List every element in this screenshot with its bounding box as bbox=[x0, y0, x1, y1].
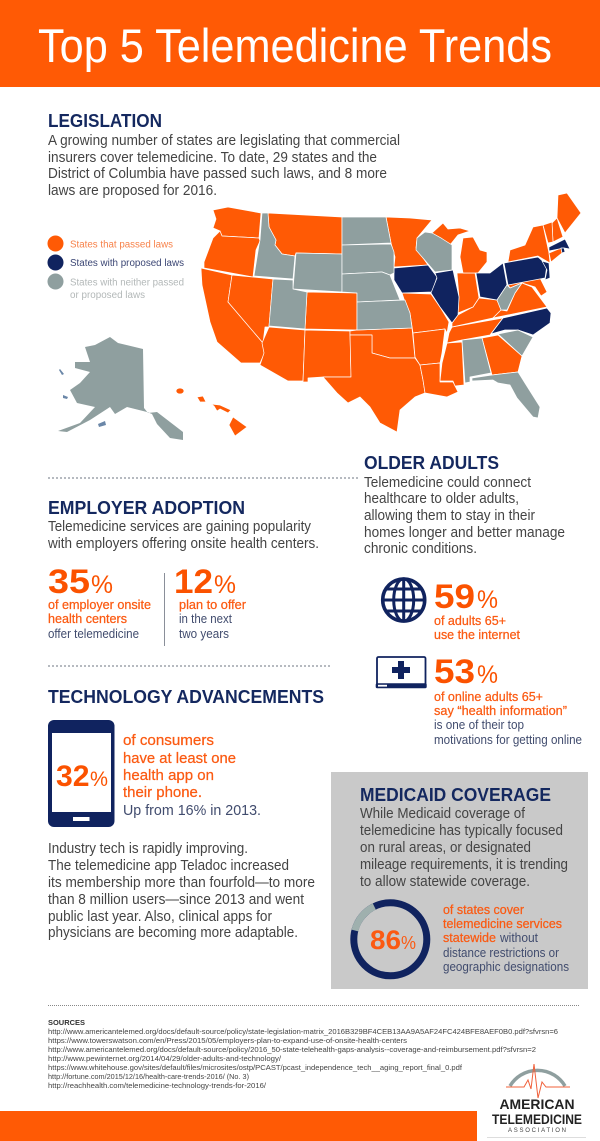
technology body text bbox=[48, 841, 315, 941]
panel: older adults bbox=[364, 453, 582, 747]
app statistic text: of consumers bbox=[123, 732, 214, 749]
stat: 35 percent: % bbox=[91, 571, 113, 599]
map legend bbox=[48, 236, 184, 301]
map legend: States with proposed laws bbox=[70, 258, 184, 269]
sources list: https://www.towerswatson.com/en/Press/2015/05/employers-plan-to-expand-use-of-onsite-health-centers bbox=[48, 1036, 407, 1045]
medicaid statistic text: telemedicine services bbox=[443, 916, 562, 931]
panel: older adults: healthcare to older adults, bbox=[364, 491, 519, 507]
stat: 59 percent: % bbox=[477, 586, 498, 614]
panel: medicaid coverage: MEDICAID COVERAGE bbox=[360, 785, 551, 805]
stat: 12 percent: two years bbox=[179, 626, 229, 641]
app statistic text: health app on bbox=[123, 767, 214, 784]
panel: older adults: allowing them to stay in their bbox=[364, 508, 535, 524]
medicaid statistic text: statewide bbox=[443, 930, 496, 945]
icon: globe bbox=[382, 579, 425, 621]
medicaid statistic text: distance restrictions or bbox=[443, 945, 560, 960]
stat: 12 percent bbox=[174, 563, 247, 641]
US map bbox=[58, 193, 581, 440]
sources list: http://reachhealth.com/telemedicine-technology-trends-for-2016/ bbox=[48, 1081, 267, 1090]
stat: 53 percent: % bbox=[477, 661, 498, 689]
stat: 53 percent: is one of their top bbox=[434, 717, 524, 732]
map legend: or proposed laws bbox=[70, 290, 145, 301]
sources list: SOURCES bbox=[48, 1018, 85, 1027]
panel: medicaid coverage: on rural areas, or designated bbox=[360, 840, 531, 856]
medicaid statistic text bbox=[443, 902, 569, 974]
app statistic text: have at least one bbox=[123, 750, 236, 767]
medicaid statistic text: geographic designations bbox=[443, 959, 569, 974]
stat: 53 percent bbox=[434, 653, 582, 747]
app statistic text: their phone. bbox=[123, 784, 202, 801]
stat: 12 percent: in the next bbox=[179, 611, 232, 626]
stat: 12 percent: plan to offer bbox=[179, 597, 247, 612]
icon: tablet with 32 percent: % bbox=[90, 768, 108, 791]
logo: American Telemedicine Association: TELEMEDICINE bbox=[492, 1111, 582, 1127]
panel: older adults: chronic conditions. bbox=[364, 541, 477, 557]
stat: 59 percent bbox=[434, 578, 520, 642]
map legend: States that passed laws bbox=[70, 240, 173, 250]
stat: 53 percent: of online adults 65+ bbox=[434, 689, 543, 704]
stat: 53 percent: say “health information” bbox=[434, 703, 567, 718]
sources list: http://fortune.com/2015/12/16/health-care-trends-2016/ (No. 3) bbox=[48, 1072, 249, 1081]
panel: medicaid coverage: mileage requirements, it is trending bbox=[360, 857, 568, 873]
panel: legislation text: LEGISLATION bbox=[48, 111, 162, 131]
medicaid statistic text: of states cover bbox=[443, 902, 525, 917]
sources list: http://www.pewinternet.org/2014/04/29/older-adults-and-technology/ bbox=[48, 1054, 282, 1063]
sources list bbox=[48, 1018, 558, 1090]
stat: 59 percent: of adults 65+ bbox=[434, 613, 506, 628]
footer bar bbox=[0, 1111, 477, 1141]
panel: employer adoption: Telemedicine services are gaining popularity bbox=[48, 519, 312, 535]
panel: legislation text: insurers cover telemedicine. To date, 29 states and the bbox=[48, 150, 377, 166]
technology body text: public last year. Also, clinical apps for bbox=[48, 909, 272, 925]
panel: medicaid coverage: While Medicaid coverage of bbox=[360, 806, 526, 822]
icon: tablet with 32 percent: 32 bbox=[56, 760, 90, 793]
panel: older adults: Telemedicine could connect bbox=[364, 475, 531, 491]
logo: American Telemedicine Association: ASSOCIATION bbox=[508, 1128, 566, 1134]
title banner bbox=[0, 0, 600, 87]
states with neither passed nor proposed laws bbox=[58, 213, 540, 440]
stat: 35 percent: health centers bbox=[48, 611, 127, 626]
sources list: http://www.americantelemed.org/docs/default-source/policy/state-legislation-matrix_2016B329BF4CEB13AA9A5AF24FC424BFE8AEF0B0.pdf?sfvrsn=6 bbox=[48, 1027, 558, 1036]
stat: 12 percent: 12 bbox=[174, 563, 213, 601]
panel: medicaid coverage: to allow statewide coverage. bbox=[360, 874, 530, 890]
logo: American Telemedicine Association: AMERICAN bbox=[500, 1096, 574, 1112]
stat: 35 percent bbox=[48, 563, 151, 641]
divider bbox=[48, 665, 330, 667]
stat: 53 percent: 53 bbox=[434, 653, 475, 691]
sources list: http://www.americantelemed.org/docs/default-source/policy/2016_50-state-telehealth-gaps-analysis--coverage-and-reimbursement.pdf?sfvrsn=2 bbox=[48, 1045, 536, 1054]
technology body text: The telemedicine app Teladoc increased bbox=[48, 858, 289, 874]
panel: medicaid coverage: telemedicine has typically focused bbox=[360, 823, 563, 839]
medicaid statistic text: without bbox=[499, 930, 538, 945]
stat: 35 percent: of employer onsite bbox=[48, 597, 151, 612]
technology body text: Industry tech is rapidly improving. bbox=[48, 841, 248, 857]
donut chart: 86 percent: 86 bbox=[370, 925, 401, 955]
technology body text: than 8 million users—since 2013 and went bbox=[48, 892, 304, 908]
panel: medicaid coverage bbox=[331, 772, 588, 989]
icon: laptop with medical cross bbox=[376, 657, 427, 688]
map legend: States with neither passed bbox=[70, 278, 184, 288]
technology body text: its membership more than fourfold—to more bbox=[48, 875, 315, 891]
panel: employer adoption bbox=[47, 498, 319, 646]
donut chart: 86 percent bbox=[354, 903, 427, 976]
app statistic text bbox=[123, 732, 261, 819]
panel: legislation text: laws are proposed for 2016. bbox=[48, 183, 217, 199]
stat: 59 percent: use the internet bbox=[434, 627, 520, 642]
panel: technology advancements: TECHNOLOGY ADVANCEMENTS bbox=[48, 687, 324, 707]
panel: legislation text bbox=[48, 111, 400, 199]
stat: 59 percent: 59 bbox=[434, 578, 475, 616]
stat: 53 percent: motivations for getting online bbox=[434, 732, 582, 747]
donut chart: 86 percent: % bbox=[401, 933, 416, 953]
stat: 35 percent: 35 bbox=[48, 563, 90, 601]
panel: older adults: OLDER ADULTS bbox=[364, 453, 499, 473]
divider bbox=[48, 477, 360, 479]
logo: American Telemedicine Association bbox=[487, 1064, 586, 1138]
divider bbox=[48, 1004, 580, 1006]
states that passed laws bbox=[176, 193, 581, 436]
panel: legislation text: District of Columbia have passed such laws, and 8 more bbox=[48, 166, 387, 182]
panel: legislation text: A growing number of states are legislating that commercial bbox=[48, 133, 400, 149]
technology body text: physicians are becoming more adaptable. bbox=[48, 925, 298, 941]
icon: tablet with 32 percent bbox=[48, 720, 114, 827]
panel: employer adoption: with employers offering onsite health centers. bbox=[47, 536, 319, 552]
stat: 35 percent: offer telemedicine bbox=[48, 626, 139, 641]
panel: employer adoption: EMPLOYER ADOPTION bbox=[48, 498, 245, 518]
stat: 12 percent: % bbox=[214, 571, 236, 599]
title banner: Top 5 Telemedicine Trends bbox=[38, 19, 552, 72]
states with proposed laws bbox=[394, 239, 570, 335]
app statistic text: Up from 16% in 2013. bbox=[123, 802, 261, 819]
panel: older adults: homes longer and better manage bbox=[364, 525, 565, 541]
panel: technology advancements bbox=[48, 687, 324, 941]
sources list: https://www.whitehouse.gov/sites/default/files/microsites/ostp/PCAST/pcast_independence_tech__aging_report_final_0.pdf bbox=[48, 1063, 463, 1072]
